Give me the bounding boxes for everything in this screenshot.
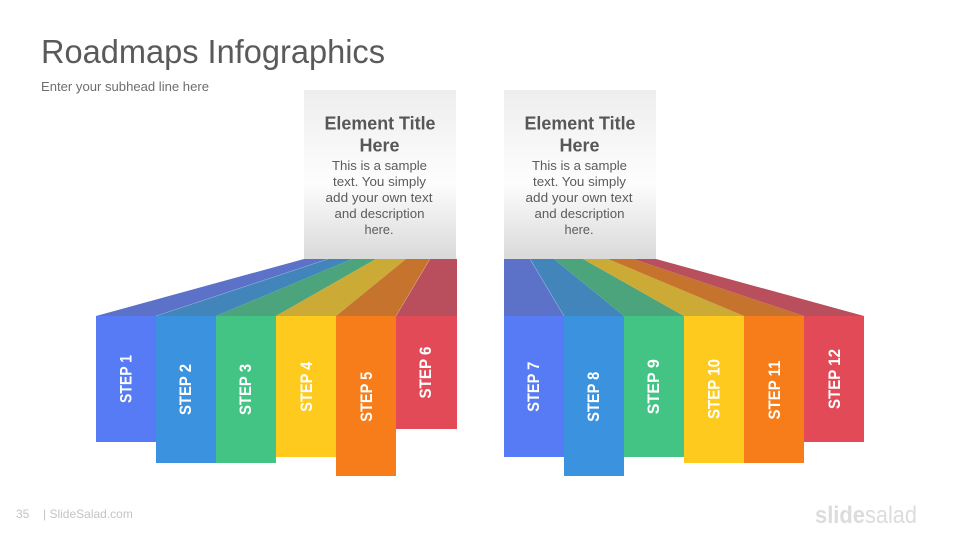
step 4 bar [276,316,336,457]
left element description [326,159,433,237]
title: Roadmaps Infographics [41,33,385,70]
step 5 bar [336,316,396,476]
right element description: and description [534,207,625,221]
step 4 bar: STEP 4 [297,361,316,412]
step 10 bar: STEP 10 [704,359,724,419]
right element description: This is a sample [532,159,627,173]
logo wordmark: salad [865,502,917,529]
step 1 bar [96,316,156,442]
footer brand text: | SlideSalad.com [43,507,133,521]
step 7 bar [504,316,564,457]
page number: 35 [16,507,30,521]
right perspective road [504,259,864,316]
left element description: add your own text [326,191,433,205]
right element description [526,159,633,237]
logo wordmark [815,502,917,529]
step 8 bar: STEP 8 [584,372,603,422]
step 6 bar [396,316,457,429]
left perspective road [96,259,457,316]
step 2 bar: STEP 2 [176,364,195,415]
left element description: and description [334,207,425,221]
left element title: Here [360,134,400,156]
step 12 bar [804,316,864,442]
step 7 bar: STEP 7 [524,362,543,412]
left element description: here. [364,223,394,237]
step 3 bar: STEP 3 [236,364,255,415]
left element description: This is a sample [332,159,427,173]
right element description: here. [564,223,594,237]
left element title [324,112,436,156]
logo wordmark: slide [815,502,865,529]
step 3 bar [216,316,276,463]
right element title: Element Title [524,112,636,134]
step 11 bar [744,316,804,463]
step 9 bar: STEP 9 [644,359,663,414]
left element title: Element Title [324,112,436,134]
step 10 bar [684,316,744,463]
step 9 bar [624,316,684,457]
step 1 bar: STEP 1 [116,355,136,403]
step 5 bar: STEP 5 [357,372,376,422]
step 6 bar: STEP 6 [416,346,435,398]
panel: right element [504,90,656,259]
right element description: text. You simply [533,175,627,189]
right element title: Here [560,134,600,156]
right element title [524,112,636,156]
step 2 bar [156,316,216,463]
step 8 bar [564,316,624,476]
panel: left element [304,90,456,259]
right element description: add your own text [526,191,633,205]
left element description: text. You simply [333,175,427,189]
step 12 bar: STEP 12 [825,349,844,409]
subhead: Enter your subhead line here [41,80,209,94]
step 11 bar: STEP 11 [765,360,784,420]
